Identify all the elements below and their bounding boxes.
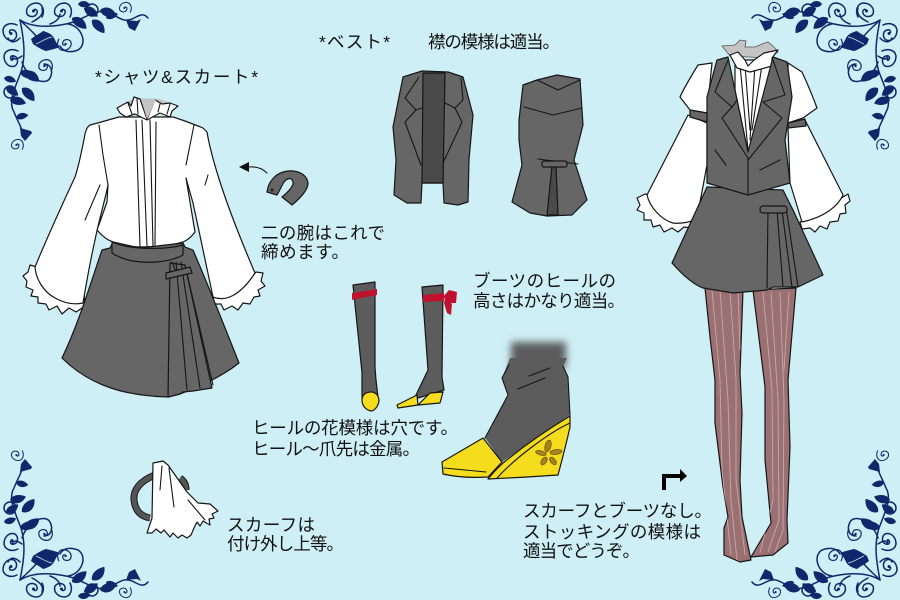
note: armband: 二の腕はこれで: [261, 223, 385, 243]
illustration: vest front: [393, 71, 473, 205]
arrow: points to outfit: [662, 469, 687, 490]
illustration: boot close-up: [442, 342, 570, 479]
puff sleeves: [680, 63, 817, 123]
armbands: [690, 110, 806, 128]
ornament: bottom-right corner: [752, 451, 897, 600]
skirt: [62, 242, 239, 397]
waistband and pleats: [112, 242, 183, 262]
collar: [722, 40, 778, 58]
note: full outfit: 適当でどうぞ。: [523, 541, 640, 561]
illustration: full outfit: [637, 40, 850, 562]
lower sleeves and cuffs: [637, 194, 850, 232]
ornament: top-left corner: [3, 0, 148, 149]
note: boots: 高さはかなり適当。: [473, 291, 625, 311]
ornament: top-right corner: [752, 0, 897, 149]
note: scarf: 付け外し上等。: [227, 534, 344, 554]
heading: vest: *ベスト*: [319, 32, 390, 52]
illustration: scarf: [134, 461, 218, 538]
arrow: armband to sleeve: [239, 162, 267, 173]
shirt collar: [122, 98, 176, 120]
note: boots: ブーツのヒールの: [473, 271, 616, 291]
note: full outfit: ストッキングの模様は: [523, 522, 701, 542]
vest: [707, 57, 792, 195]
ornament: bottom-left corner: [3, 451, 148, 600]
heading: shirt and skirt: *シャツ&スカート*: [95, 67, 258, 87]
illustration: boot front: [352, 282, 379, 411]
skirt: [672, 187, 823, 293]
note: full outfit: スカーフとブーツなし。: [523, 501, 712, 521]
note: heel: ヒールの花模様は穴です。: [252, 418, 458, 438]
skirt buckle: [166, 267, 192, 279]
stockings: [705, 288, 751, 562]
shirt front: [735, 60, 773, 152]
illustration: boot side: [397, 285, 457, 408]
illustration: vest back: [512, 75, 587, 216]
shirt body and sleeves: [35, 117, 255, 304]
shirt cuffs: [23, 265, 265, 314]
note: scarf: スカーフは: [227, 515, 315, 535]
note: armband: 締めます。: [261, 242, 349, 262]
note: heel: ヒール〜爪先は金属。: [252, 439, 420, 459]
shirt pleats: [85, 120, 208, 247]
illustration: armband: [267, 171, 308, 205]
heel flower cut-outs: [535, 439, 562, 466]
illustration: shirt and skirt: [23, 97, 265, 397]
note: collar pattern: 襟の模様は適当。: [428, 32, 560, 52]
